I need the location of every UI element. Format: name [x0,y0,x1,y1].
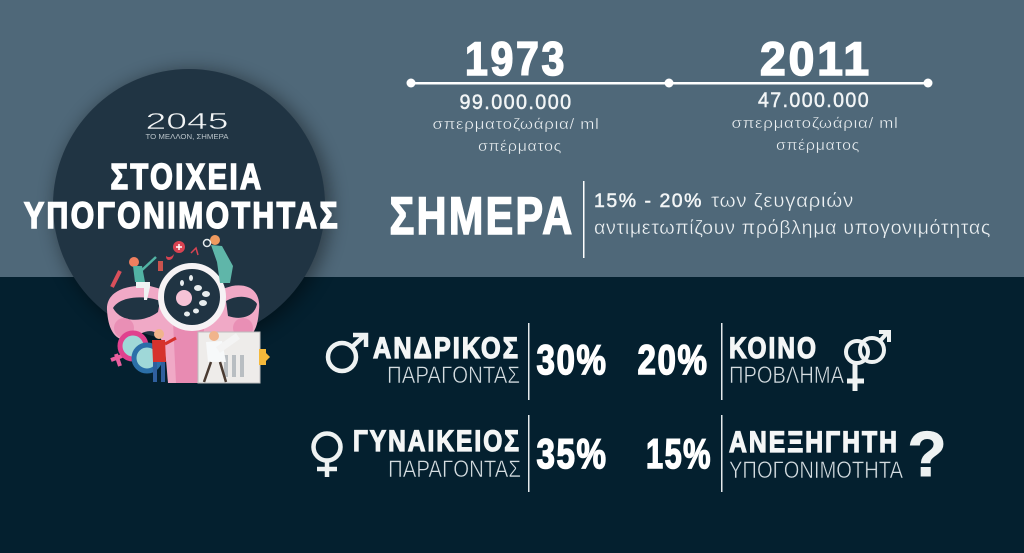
text: couples statistic: αντιμετωπίζουν πρόβλημα υπογονιμότητας [594,218,991,239]
icons: hearts and cross [166,241,198,260]
icon: female [314,434,340,477]
logo: 2045 [146,108,229,141]
logo: 2045: ΤΟ ΜΕΛΛΟΝ, ΣΗΜΕΡΑ [146,134,229,141]
panel: bottom background [0,277,1024,553]
label: unexplained: ΑΝΕΞΗΓΗΤΗ [729,426,899,459]
unit 1973: σπερματοζωάρια/ ml [432,116,600,133]
stat: female factor: ΠΑΡΑΓΟΝΤΑΣ [388,456,521,483]
uterus [107,285,259,383]
stat: unexplained: ΥΠΟΓΟΝΙΜΟΤΗΤΑ [729,457,903,484]
figure: doctor with magnifier [204,235,233,283]
title: ΥΠΟΓΟΝΙΜΟΤΗΤΑΣ [24,195,340,236]
value: 30%: 30% [536,336,608,383]
divider [528,415,530,492]
text: couples statistic [594,191,991,239]
label: male factor: ΑΝΔΡΙΚΟΣ [373,332,520,365]
stat: common problem [638,323,889,400]
panel: top background [0,0,1024,277]
value: 15%: 15% [646,430,712,477]
unit 2011: σπερματοζωάρια/ ml [732,115,898,132]
value: 35%: 35% [536,430,608,477]
magnifier with sperm and egg [161,266,223,328]
divider: today [583,181,584,258]
stat: 1973: σπέρματος [478,138,562,155]
stat: 1973 [432,32,600,155]
label: female factor: ΓΥΝΑΙΚΕΙΟΣ [353,425,521,458]
stat: unexplained [646,415,947,492]
value 1973: 99.000.000 [460,91,572,114]
label: common problem: ΚΟΙΝΟ [729,332,818,365]
clipboard with doctor [198,331,270,383]
figure: nurse with test tube [112,257,163,300]
icon: question mark: ? [907,418,947,490]
figure: man in red [152,329,176,382]
stat: male factor [328,323,608,400]
title: ΣΤΟΙΧΕΙΑ [110,156,264,197]
value 2011: 47.000.000 [758,89,870,112]
text: couples statistic: των ζευγαριών [711,191,854,212]
text: couples statistic: 15% - 20% [594,191,703,212]
illustration: fertility scene [107,235,270,383]
logo: 2045: 2045 [146,108,228,134]
stat: common problem: ΠΡΟΒΛΗΜΑ [729,362,844,389]
stat: 2011 [732,32,898,154]
divider [721,323,722,400]
year 1973: 1973 [465,32,567,85]
circle badge [53,69,331,346]
year 2011: 2011 [760,32,872,85]
stat: 2011: σπέρματος [776,137,860,154]
stat: female factor [314,415,608,492]
stat: male factor: ΠΑΡΑΓΟΝΤΑΣ [387,362,520,389]
timeline [406,78,932,88]
divider [528,323,530,400]
divider [721,415,722,492]
figure: gender symbols [111,333,160,371]
value: 20%: 20% [638,336,708,383]
icon: male and female [846,332,889,391]
title [24,156,340,236]
icon: male [328,335,366,371]
heading: today: ΣΗΜΕΡΑ [390,187,574,246]
